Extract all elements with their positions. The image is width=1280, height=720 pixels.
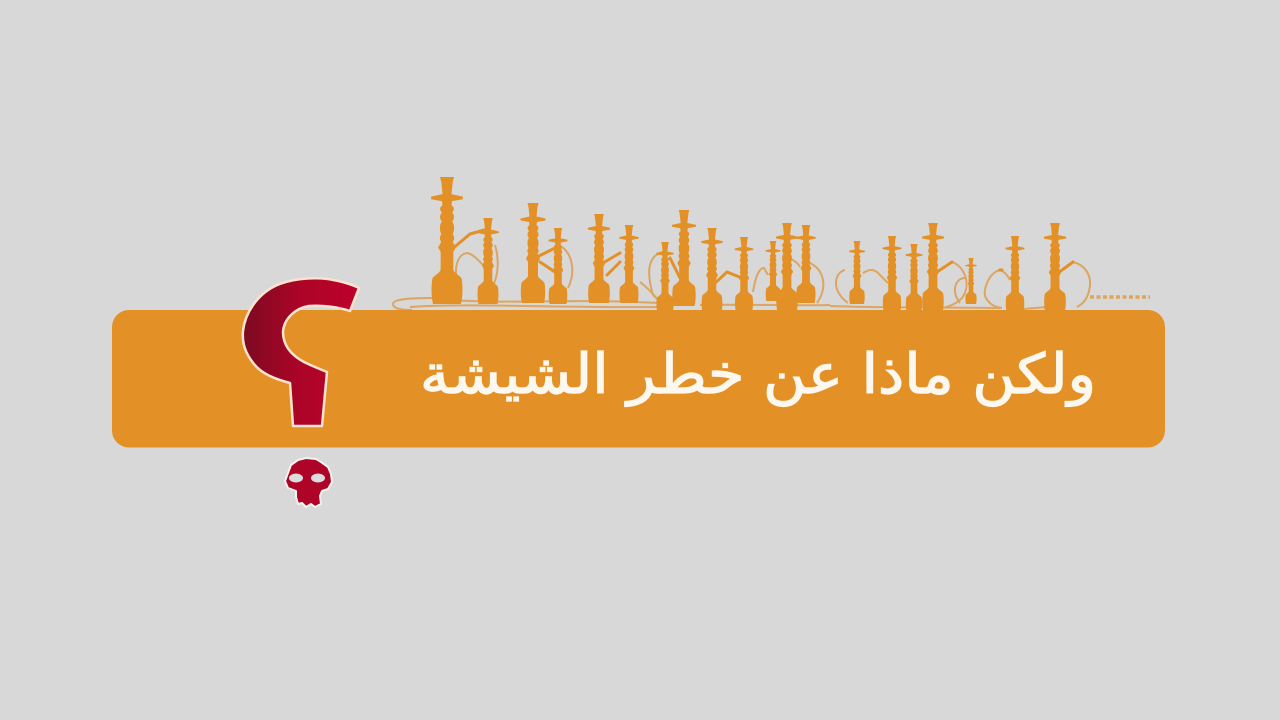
hookah 4: [548, 228, 568, 304]
hookah 15: [883, 236, 901, 311]
hookah 10: [735, 237, 753, 311]
hookah 7: [672, 210, 696, 306]
orange banner: [112, 310, 1165, 448]
hookah 17: [922, 223, 944, 311]
hookah 6: [619, 225, 639, 303]
hookah 5: [588, 214, 610, 303]
dotted line: [1090, 295, 1150, 299]
hoses: [393, 245, 1090, 310]
hookah 14: [849, 241, 865, 304]
icon: skull: [285, 458, 332, 507]
banner heading: ولكن ماذا عن خطر الشيشة: [420, 342, 1096, 407]
hookah 11: [766, 241, 780, 301]
hookah 2: [477, 218, 499, 304]
hookah 19: [1006, 236, 1024, 312]
hookah arms: [451, 230, 1073, 285]
hookah 13: [796, 225, 816, 303]
hookah 1: [431, 177, 463, 304]
icon: question mark: [243, 278, 359, 426]
hookah 3: [520, 203, 546, 303]
hookah 8: [656, 242, 674, 312]
hookah 20: [1044, 223, 1066, 312]
hookah 16: [906, 244, 922, 311]
hookah row: [431, 177, 1066, 313]
hookah 12: [776, 223, 798, 311]
hookah 9: [701, 228, 723, 313]
hookah 18: [965, 258, 977, 304]
